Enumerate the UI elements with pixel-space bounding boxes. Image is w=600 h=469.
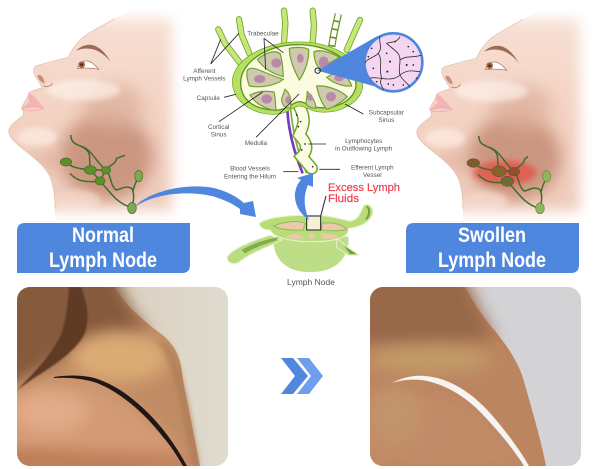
afferent vessels: [218, 11, 360, 65]
anatomy labels: Sinus: [378, 117, 394, 124]
red inflammation glow: [473, 161, 536, 185]
illustration: normal lymph node face: [0, 0, 207, 227]
callout: excess lymph fluids: Excess Lymph: [328, 182, 400, 194]
purple follicles: [254, 54, 344, 104]
label: swollen lymph node: [406, 223, 579, 273]
lower body: [273, 237, 348, 272]
anatomy labels: [183, 31, 404, 180]
label: normal lymph node: Normal: [72, 224, 134, 247]
curved blue arrow: up to efferent vessel: [295, 173, 313, 220]
anatomy labels: Lymphocytes: [345, 138, 382, 145]
anatomy labels: in Outflowing Lymph: [335, 146, 393, 153]
anatomy labels: Entering the Hilum: [224, 173, 276, 180]
white strap: [392, 376, 529, 466]
left arm: [227, 235, 282, 264]
label: normal lymph node: [17, 223, 190, 273]
zoom box: [307, 216, 321, 230]
black strap: [54, 376, 187, 466]
anatomy labels: Vessel: [363, 172, 382, 179]
anatomy labels: Medulla: [245, 140, 268, 147]
label: normal lymph node: Lymph Node: [49, 249, 157, 272]
hair: [17, 287, 88, 390]
right arm: [337, 238, 359, 255]
cortical lobes: [247, 47, 352, 111]
upper band: [259, 205, 373, 242]
node capsule: [232, 42, 363, 114]
leader lines: [211, 33, 363, 172]
diagram: lymph node cross-section: [227, 196, 373, 272]
anatomy labels: Lymph Vessels: [183, 76, 225, 83]
anatomy labels: Cortical: [208, 124, 229, 131]
caption: lymph node: Lymph Node: [287, 277, 335, 287]
anatomy labels: Subcapsular: [369, 109, 404, 116]
swollen lymph vessels and nodes: [467, 136, 551, 214]
callout: excess lymph fluids: [328, 182, 400, 205]
photo: after shoulder: [370, 287, 581, 466]
anatomy labels: Capsule: [197, 95, 220, 102]
anatomy labels: Sinus: [211, 132, 227, 139]
label: swollen lymph node: Swollen: [458, 224, 526, 247]
callout: excess lymph fluids: Fluids: [328, 193, 360, 205]
anatomy labels: Efferent Lymph: [351, 164, 394, 171]
anatomy labels: Afferent: [193, 68, 216, 75]
arrow: double chevron: [281, 358, 323, 394]
photo: before shoulder: [17, 287, 228, 466]
label: swollen lymph node: Lymph Node: [438, 249, 546, 272]
anatomy labels: Trabeculae: [247, 31, 279, 38]
diagram: lymph node anatomy: [183, 11, 422, 180]
illustration: swollen lymph node face: [408, 1, 600, 228]
normal lymph vessels and nodes: [60, 135, 143, 214]
magnified cell view: [315, 33, 422, 92]
curved blue arrow: normal node to lymph node: [133, 186, 256, 217]
efferent stem and blood vessels: [287, 107, 313, 173]
anatomy labels: Blood Vessels: [230, 166, 270, 173]
